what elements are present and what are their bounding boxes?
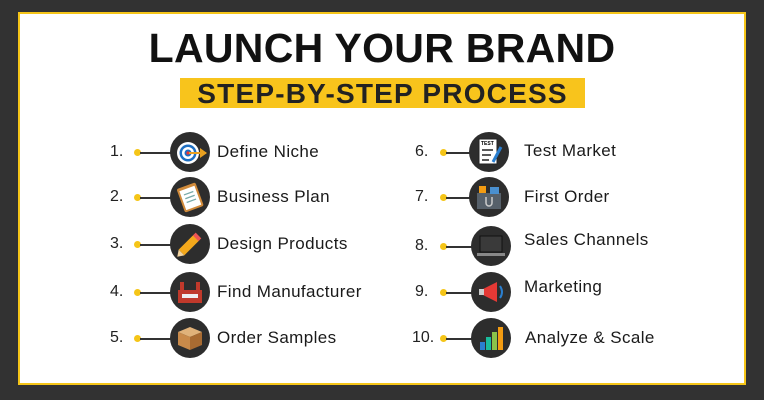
- step 1: [110, 132, 319, 172]
- step 6: [415, 132, 616, 172]
- step 7: 7.: [415, 188, 428, 205]
- step 8: [415, 226, 649, 266]
- step 5: Order Samples: [217, 328, 337, 347]
- step 4: 4.: [110, 283, 123, 300]
- step 3: 3.: [110, 235, 123, 252]
- step 2: 2.: [110, 188, 123, 205]
- step 9: Marketing: [524, 277, 602, 296]
- icon: box: [170, 318, 210, 358]
- step 4: Find Manufacturer: [217, 282, 362, 301]
- step 3: [110, 224, 348, 264]
- icon: megaphone: [471, 272, 511, 312]
- step 9: 9.: [415, 283, 428, 300]
- icon: test sheet: [469, 132, 509, 172]
- step 2: [110, 177, 330, 217]
- icon: pencil: [170, 224, 210, 264]
- step 10: Analyze & Scale: [525, 328, 655, 347]
- icon: test sheet: TEST: [481, 141, 494, 147]
- step 7: [415, 177, 610, 217]
- subtitle band: STEP-BY-STEP PROCESS: [197, 78, 568, 109]
- step 6: 6.: [415, 143, 428, 160]
- step 1: Define Niche: [217, 142, 319, 161]
- step 8: 8.: [415, 237, 428, 254]
- step 4: [110, 272, 362, 312]
- step 2: Business Plan: [217, 187, 330, 206]
- step 8: Sales Channels: [524, 230, 649, 249]
- icon: bar chart: [471, 318, 511, 358]
- step 7: First Order: [524, 187, 610, 206]
- icon: clipboard: [170, 177, 210, 217]
- step 1: 1.: [110, 143, 123, 160]
- icon: laptop: [471, 226, 511, 266]
- title: LAUNCH YOUR BRAND: [149, 25, 615, 71]
- icon: target: [170, 132, 210, 172]
- step 3: Design Products: [217, 234, 348, 253]
- step 6: Test Market: [524, 141, 616, 160]
- step 10: [412, 318, 655, 358]
- icon: factory: [170, 272, 210, 312]
- icon: shopping bag: [469, 177, 509, 217]
- step 5: 5.: [110, 329, 123, 346]
- step 9: [415, 272, 602, 312]
- step 10: 10.: [412, 329, 434, 346]
- step 5: [110, 318, 337, 358]
